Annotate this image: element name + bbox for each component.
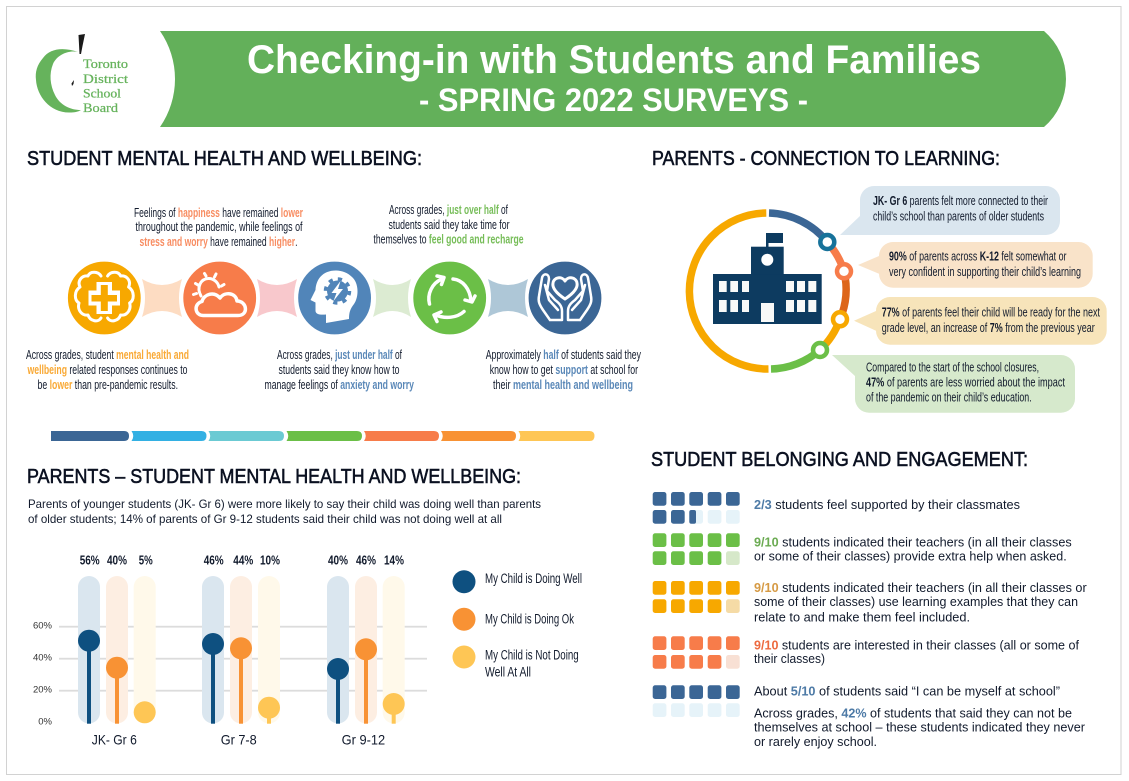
group: JK-Gr 6: 5% [139,554,153,568]
callout: JK-Gr 6 connected: child’s school than parents of older students [873,209,1044,224]
group: JK-Gr 6: 56% [80,554,100,568]
group: JK-Gr 6 [78,554,156,748]
group: Gr 9-12: 14% [384,554,404,568]
icon: hands holding heart [528,261,602,335]
logo: Toronto District School Board: School [83,86,121,100]
callout: 47% less worried [832,355,1075,413]
panel: student mental health and wellbeing [26,202,641,392]
text: 9/10 extra help: or some of their classes) provide extra help when asked. [754,549,1067,564]
callout: 77% ready: grade level, an increase of 7% from the previous year [882,320,1095,335]
group: Gr 7-8: 46% [204,554,224,568]
axis labels: 40% [33,652,53,664]
subtitle: - SPRING 2022 SURVEYS - [419,82,808,118]
logo: Toronto District School Board: Toronto [83,56,128,71]
waffle: 5/10 myself at school [653,685,740,717]
text: support at school: know how to get support at school for [490,362,638,377]
legend: My Child is Not Doing [485,648,579,662]
panel: connection ring with school [689,186,1107,413]
text: 9/10 learning examples: some of their classes) use learning examples that they can [754,594,1078,609]
callout: 90% confident: 90% of parents across K-12 felt somewhat or [889,249,1067,264]
text: 9/10 learning examples [754,580,1087,624]
waffle: 9/10 extra help [653,533,740,565]
waffle: 2/3 supported [653,492,740,524]
text: just under half: students said they know how to [278,362,400,377]
text: parents summary [28,497,541,526]
text: just over half: students said they take time for [388,217,510,232]
text: support at school: their mental health and wellbeing [493,377,633,392]
text: just over half: themselves to feel good and recharge [374,232,524,246]
axis labels: 0% [38,716,53,728]
text: happiness lower: Feelings of happiness have remained lower [134,205,303,220]
text: support at school: Approximately half of students said they [486,347,641,362]
callout: 77% ready [854,297,1107,345]
text: 9/10 extra help [754,535,1072,564]
text: 9/10 learning examples: relate to and make them feel included. [754,610,970,624]
panel: student belonging and engagement [653,492,1087,749]
text: mental health lower: wellbeing related responses continues to [27,362,188,377]
icon: school building [713,233,822,324]
axis labels [33,620,53,728]
ring [689,213,851,369]
text: 9/10 extra help: 9/10 students indicated their teachers (in all their classes [754,535,1072,550]
callout: 90% confident [858,242,1093,288]
legend: My Child is Doing Well [485,571,582,586]
chart: parents lollipop chart by grade [33,554,427,748]
heading: student mental health and wellbeing: STUDENT MENTAL HEALTH AND WELLBEING: [27,148,422,170]
connector shapes [142,279,528,317]
group: Gr 7-8: Gr 7-8 [221,732,257,748]
text: parents summary: of older students; 14% of parents of Gr 9-12 students said their child was not doing well at all [28,512,502,526]
text: just under half [264,347,415,392]
group: JK-Gr 6: 40% [107,554,127,568]
icon: brain with cross [67,261,142,335]
text: just over half [374,202,524,246]
text: just under half: Across grades, just under half of [277,347,402,362]
text: just over half: Across grades, just over half of [389,202,508,217]
text: 2/3 supported: 2/3 students feel supported by their classmates [754,497,1020,512]
text: 5/10 myself at school: or rarely enjoy school. [754,734,877,749]
text: 5/10 myself at school: About 5/10 of students said “I can be myself at school” [754,684,1060,699]
logo: Toronto District School Board: District [83,71,128,86]
group: JK-Gr 6: JK- Gr 6 [92,732,137,748]
text: mental health lower: Across grades, student mental health and [26,347,189,362]
text: just under half: manage feelings of anxiety and worry [264,377,415,392]
group: Gr 9-12: Gr 9-12 [342,732,385,748]
text: mental health lower: be lower than pre-pandemic results. [38,377,178,392]
text: happiness lower: stress and worry have remained higher. [140,234,297,249]
text: 9/10 interested: 9/10 students are interested in their classes (all or some of [754,637,1079,652]
group: Gr 7-8: 10% [260,554,280,568]
text: support at school [486,347,641,392]
callout: 47% less worried: Compared to the start of the school closures, [866,360,1039,375]
group: Gr 9-12: 40% [328,554,348,568]
logo: Toronto District School Board: Board [83,100,119,115]
multicolour divider bar [51,431,594,441]
legend: My Child is Doing Ok [485,612,574,626]
waffle: 9/10 interested [653,636,740,669]
logo: Toronto District School Board [36,34,128,115]
text: 9/10 interested [754,637,1079,666]
text: 9/10 interested: their classes) [754,651,825,666]
title banner [160,31,1066,127]
text: happiness lower [134,205,303,249]
text: 9/10 learning examples: 9/10 students indicated their teachers (in all their classes or [754,580,1087,595]
icon: recycling arrows [412,261,487,335]
text: 5/10 myself at school [754,684,1086,749]
axis labels: 60% [33,620,53,632]
waffle: 9/10 learning examples [653,581,740,613]
text: mental health lower [26,347,189,392]
callout: 47% less worried: of the pandemic on their child’s education. [866,390,1032,405]
group: Gr 9-12: 46% [356,554,376,568]
group: Gr 7-8: 44% [233,554,253,568]
heading: parents student mental health: PARENTS – STUDENT MENTAL HEALTH AND WELLBEING: [27,466,521,488]
group: Gr 9-12 [327,554,405,748]
icon: sun and cloud [182,261,257,335]
heading: parents connection to learning: PARENTS - CONNECTION TO LEARNING: [652,148,1000,170]
text: happiness lower: throughout the pandemic, while feelings of [136,219,303,234]
callout: JK-Gr 6 connected: JK- Gr 6 parents felt more connected to their [873,193,1048,208]
legend [452,570,582,680]
text: 5/10 myself at school: themselves at school – these students indicated they never [754,720,1086,734]
legend: Well At All [485,664,531,680]
axis labels: 20% [33,684,53,696]
text: 5/10 myself at school: Across grades, 42% of students that said they can not be [754,705,1072,720]
text: parents summary: Parents of younger students (JK- Gr 6) were more likely to say their child was doing well than parents [28,497,541,511]
callout: JK-Gr 6 connected [840,186,1060,235]
heading: student belonging and engagement: STUDENT BELONGING AND ENGAGEMENT: [651,449,1028,471]
title: Checking-in with Students and Families [247,38,981,82]
icon: head with gear and lightning [297,261,372,335]
group: Gr 7-8 [202,554,280,748]
